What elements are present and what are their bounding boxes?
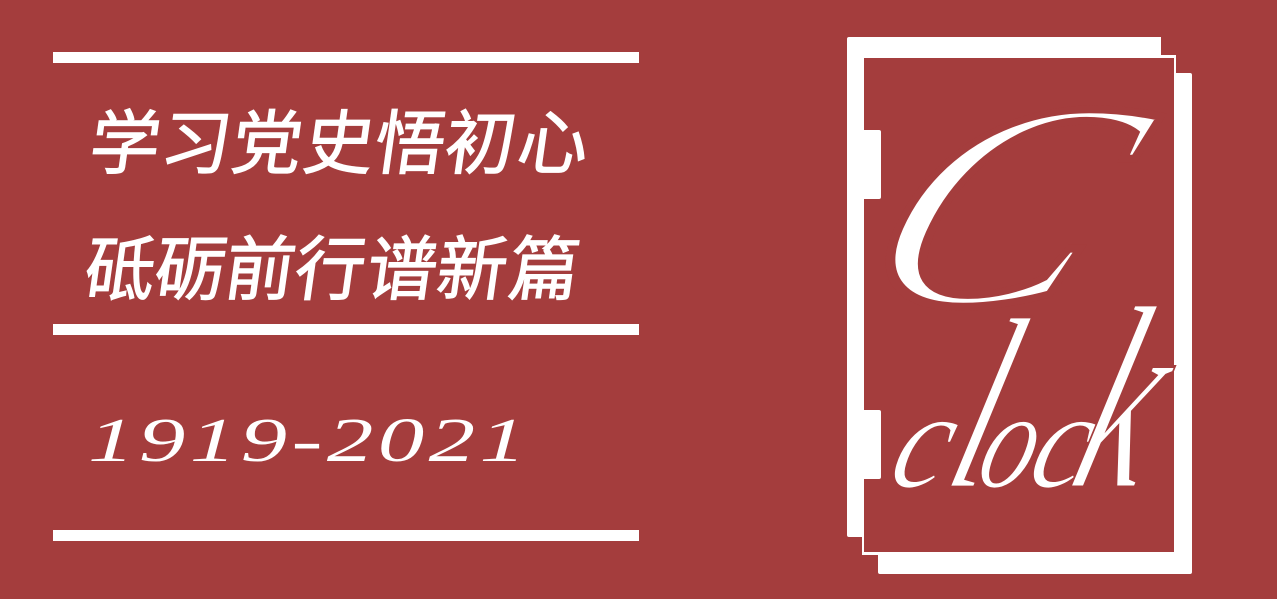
date range: 1919-2021 (88, 407, 526, 475)
heading line two: 砥 (80, 230, 161, 309)
heading line two: 新 (432, 230, 513, 309)
heading line two: 篇 (504, 230, 585, 309)
heading line two: 砺 (150, 230, 231, 309)
heading line one (85, 104, 594, 183)
logo word clock: o (963, 362, 1064, 517)
frame: inner panel (864, 58, 1174, 552)
heading line one: 初 (440, 104, 521, 183)
heading line one: 悟 (370, 104, 451, 183)
heading line one: 习 (156, 104, 237, 183)
logo word clock (876, 255, 1210, 544)
logo word clock: l (926, 269, 1050, 541)
logo frame (847, 37, 1192, 574)
frame: back sheet and tabs (847, 37, 1192, 574)
logo word clock: k (1048, 255, 1210, 544)
logo letter C: C (818, 42, 1198, 368)
heading line two (80, 230, 585, 309)
heading line two: 前 (220, 230, 301, 309)
heading line one: 史 (299, 104, 380, 183)
divider bar: top (53, 52, 639, 63)
heading line two: 谱 (362, 230, 443, 309)
divider bar: middle (53, 324, 639, 335)
heading line one: 党 (227, 104, 308, 183)
heading line one: 心 (513, 104, 594, 183)
heading line one: 学 (85, 104, 166, 183)
heading line two: 行 (290, 230, 371, 309)
logo word clock: c (876, 362, 979, 518)
logo word clock: c (1015, 362, 1118, 518)
divider bar: bottom (53, 530, 639, 541)
